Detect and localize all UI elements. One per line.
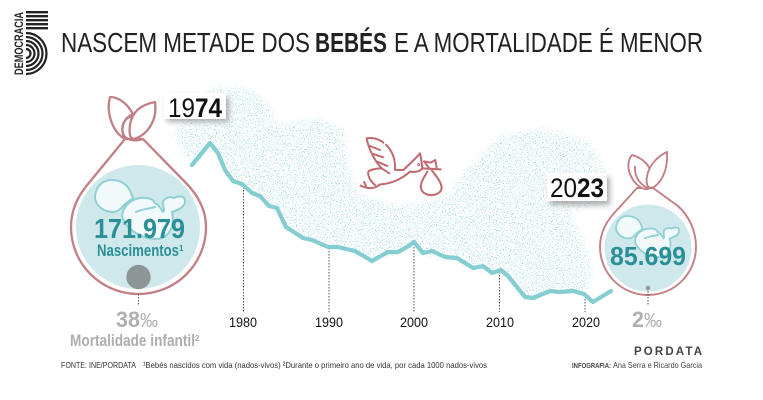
- mortality label: 2: [195, 334, 200, 343]
- bag outline: [600, 188, 696, 295]
- bag knot and leaves: [109, 97, 155, 140]
- axis labels: 2010: [486, 314, 514, 330]
- bag outline: [71, 139, 206, 294]
- source footnote: FONTE: INE/PORDATA: [61, 360, 136, 370]
- births label: Nascimentos: [97, 241, 179, 260]
- chart: year drop lines: [244, 184, 585, 312]
- axis labels: 2000: [400, 314, 428, 330]
- infographic credit: Ana Serra e Ricardo Garcia: [613, 360, 702, 370]
- mortality value 2023: ‰: [644, 310, 662, 332]
- births circle: [76, 165, 200, 289]
- year label 1974: 19: [168, 93, 195, 123]
- mortality value 1974: [116, 307, 158, 332]
- bag knot and leaves: [628, 152, 667, 189]
- icon: stork: [361, 138, 442, 195]
- logo: Democracia 50 anos: [14, 11, 48, 75]
- mortality value 2023: [632, 307, 662, 332]
- mortality leader 2023: [647, 291, 649, 305]
- births number: 171.979: [94, 213, 185, 244]
- mortality label: Mortalidade infantil: [70, 331, 195, 350]
- births circle: [604, 204, 692, 292]
- infographic credit: [572, 360, 702, 370]
- panel: 1974 bag: [71, 97, 206, 294]
- title: BEBÉS: [315, 27, 387, 58]
- chart: births line: [192, 143, 611, 302]
- panel: 2023 bag: [600, 152, 696, 295]
- title: [61, 27, 703, 58]
- year label 2023: [547, 173, 610, 205]
- year label 1974: [164, 93, 229, 123]
- births number: 85.699: [610, 241, 686, 271]
- title: NASCEM METADE DOS: [61, 27, 310, 58]
- mortality value 2023: 2: [632, 307, 644, 332]
- year label 1974: 74: [195, 93, 222, 123]
- mortality value 1974: 38: [116, 307, 140, 332]
- mortality dot: [126, 265, 151, 289]
- icon: baby: [95, 180, 185, 239]
- mortality dot: [646, 286, 650, 290]
- mortality value 1974: ‰: [140, 310, 158, 332]
- logo: Pordata: PORDATA: [634, 346, 702, 358]
- mortality leader 1974: [138, 294, 140, 306]
- source footnote: ¹Bebés nascidos com vida (nados-vivos) ²Durante o primeiro ano de vida, por cada 1000 nados-vivos: [143, 360, 487, 370]
- year label 2023: 20: [550, 173, 577, 203]
- speckled area above the line: [170, 84, 609, 301]
- axis labels: 2020: [572, 314, 600, 330]
- infographic credit: INFOGRAFIA:: [572, 361, 611, 370]
- axis labels: [229, 314, 600, 330]
- axis labels: 1980: [229, 314, 257, 330]
- births label: 1: [179, 244, 184, 253]
- axis labels: 1990: [315, 314, 343, 330]
- year label 2023: 23: [577, 173, 604, 203]
- icon: baby: [616, 216, 679, 257]
